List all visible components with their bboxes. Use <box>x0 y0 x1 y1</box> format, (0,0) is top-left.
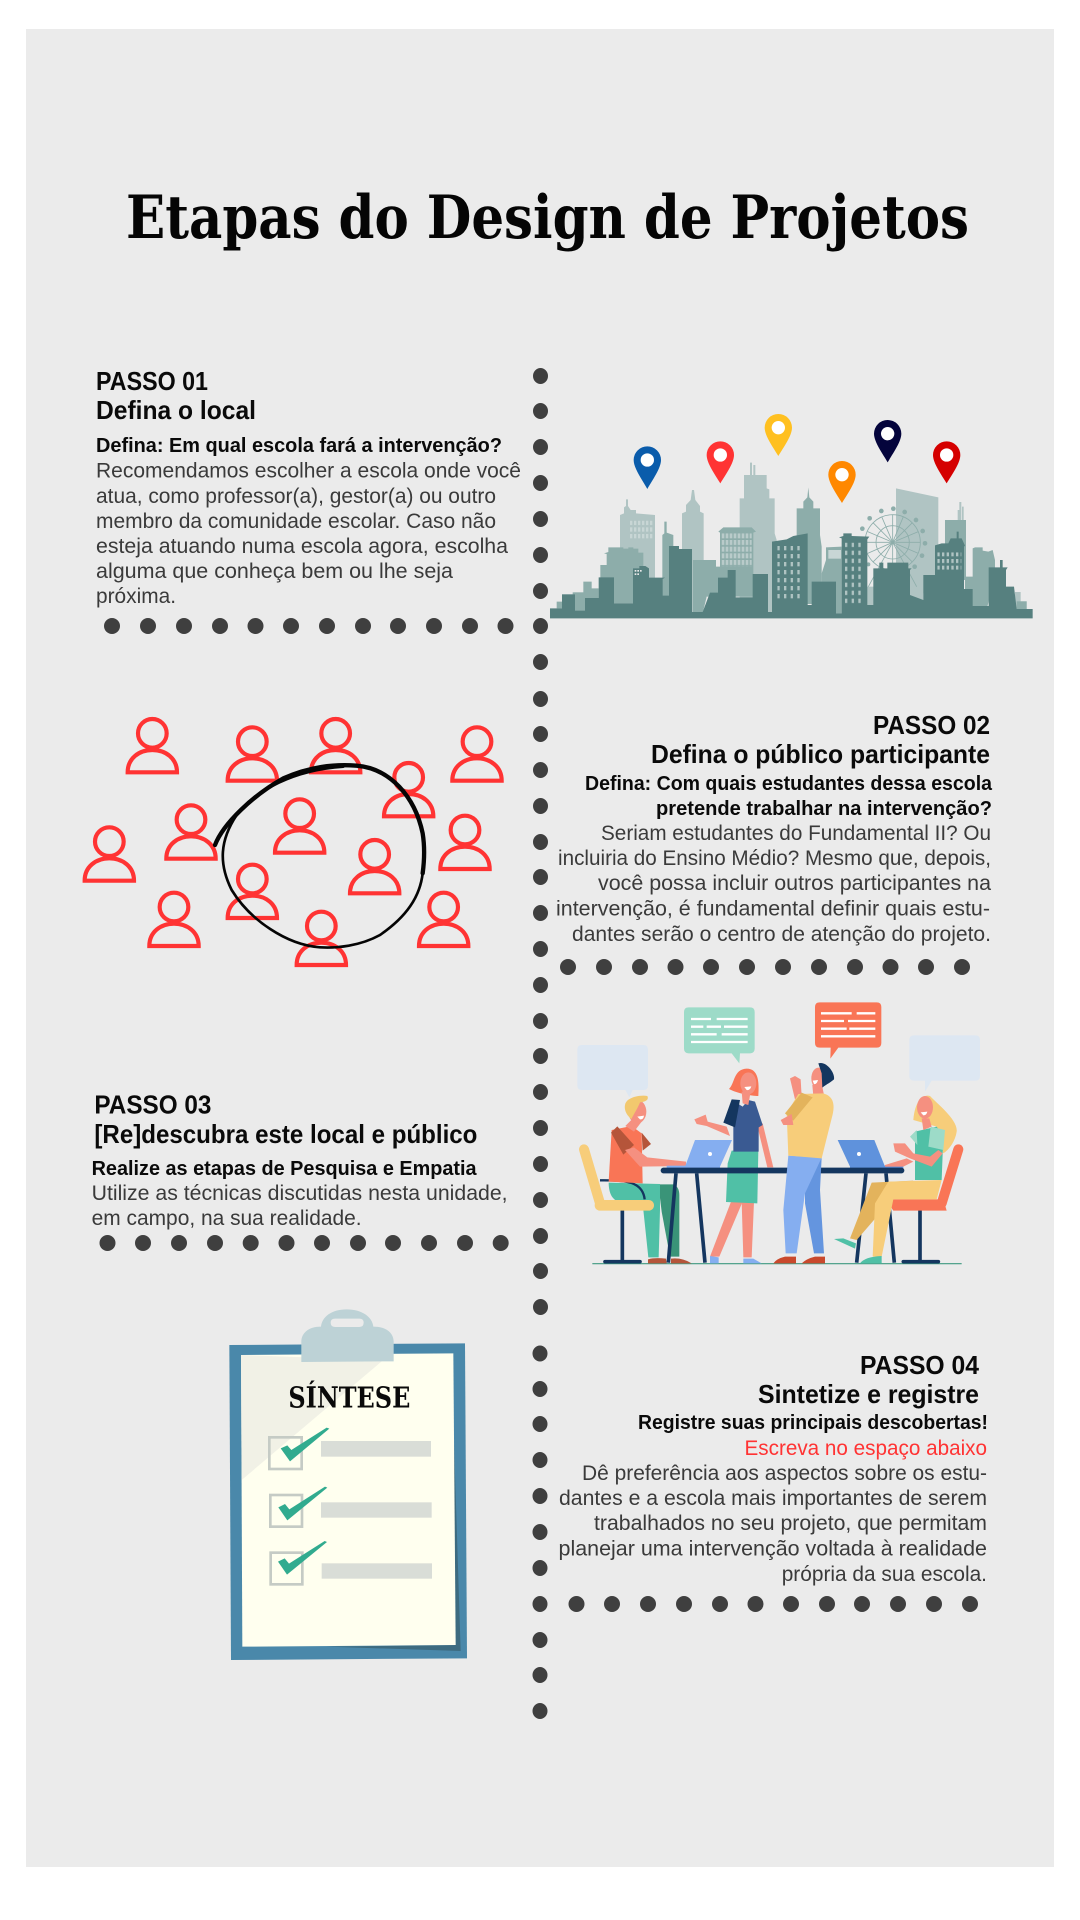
clipboard heading: SÍNTESE <box>288 1379 410 1414</box>
panel: passo 03 text <box>92 1090 508 1230</box>
panel: passo 03 text: em campo, na sua realidade. <box>92 1207 362 1230</box>
panel: passo 02 text: Defina: Com quais estudantes dessa escola <box>585 772 993 795</box>
panel: passo 04 text: PASSO 04 <box>860 1350 980 1380</box>
panel: passo 03 text: Utilize as técnicas discutidas nesta unidade, <box>92 1182 508 1205</box>
panel: passo 02 text: Seriam estudantes do Fundamental II? Ou <box>601 822 991 845</box>
vertical dotted timeline <box>532 368 548 1719</box>
illustration: síntese clipboard <box>229 1309 467 1660</box>
panel: passo 03 text: Realize as etapas de Pesquisa e Empatia <box>92 1157 477 1180</box>
panel: passo 02 text <box>556 710 993 946</box>
panel: passo 03 text: PASSO 03 <box>94 1090 211 1120</box>
passo 03 dotted divider <box>100 1235 509 1251</box>
table <box>661 1168 904 1263</box>
panel: passo 02 text: incluiria do Ensino Médio? Mesmo que, depois, <box>558 847 991 870</box>
hand-drawn circle <box>215 765 424 948</box>
laptops <box>667 1140 903 1168</box>
title: Etapas do Design de Projetos <box>126 183 969 253</box>
panel: passo 01 text: próxima. <box>96 585 176 608</box>
illustration: city skyline with map pins <box>550 414 1033 618</box>
panel: passo 02 text: intervenção, é fundamental definir quais estu- <box>556 898 990 920</box>
panel: passo 01 text: membro da comunidade escolar. Caso não <box>96 510 496 533</box>
panel: passo 04 text: Escreva no espaço abaixo <box>744 1437 987 1460</box>
panel: passo 01 text: atua, como professor(a), gestor(a) ou outro <box>96 485 496 508</box>
checklist <box>269 1428 432 1584</box>
panel: passo 02 text: PASSO 02 <box>873 710 990 740</box>
panel: passo 01 text: Defina: Em qual escola fará a intervenção? <box>96 434 502 457</box>
standing woman <box>694 1069 773 1263</box>
panel: passo 04 text: Sintetize e registre <box>758 1379 979 1409</box>
passo 04 dotted divider <box>568 1596 978 1612</box>
standing man <box>773 1063 834 1263</box>
panel: passo 04 text: dantes e a escola mais importantes de serem <box>559 1487 987 1510</box>
ground line <box>592 1262 962 1265</box>
panel: passo 01 text: PASSO 01 <box>96 366 208 396</box>
panel: passo 04 text: própria da sua escola. <box>782 1563 987 1586</box>
illustration: team talking around a table <box>577 1002 980 1264</box>
panel: passo 02 text: você possa incluir outros participantes na <box>598 872 991 895</box>
panel: passo 01 text <box>96 366 521 608</box>
panel: passo 02 text: dantes serão o centro de atenção do projeto. <box>572 923 991 946</box>
illustration: group of people with one circled <box>85 719 502 965</box>
left man on chair <box>584 1096 692 1263</box>
passo 02 dotted divider <box>560 959 970 975</box>
seated woman <box>834 1096 958 1263</box>
panel: passo 04 text: trabalhados no seu projeto, que permitam <box>594 1512 987 1535</box>
panel: passo 01 text: Recomendamos escolher a escola onde você <box>96 460 521 482</box>
panel: passo 04 text: planejar uma intervenção voltada à realidade <box>558 1538 987 1560</box>
speech bubbles <box>577 1002 980 1097</box>
passo 01 dotted divider <box>104 618 514 634</box>
panel: passo 02 text: pretende trabalhar na intervenção? <box>656 797 992 820</box>
panel: passo 04 text <box>558 1350 988 1586</box>
panel: passo 01 text: Defina o local <box>96 395 256 425</box>
panel: passo 01 text: esteja atuando numa escola agora, escolha <box>96 535 508 558</box>
ferris wheel <box>860 506 927 587</box>
clip <box>301 1309 394 1362</box>
panel: passo 01 text: alguma que conheça bem ou lhe seja <box>96 560 453 583</box>
map pins <box>634 414 960 503</box>
panel: passo 02 text: Defina o público participante <box>651 739 990 769</box>
panel: passo 03 text: [Re]descubra este local e público <box>94 1119 477 1149</box>
panel: passo 04 text: Dê preferência aos aspectos sobre os estu- <box>582 1462 987 1485</box>
panel: passo 04 text: Registre suas principais descobertas! <box>638 1411 988 1434</box>
